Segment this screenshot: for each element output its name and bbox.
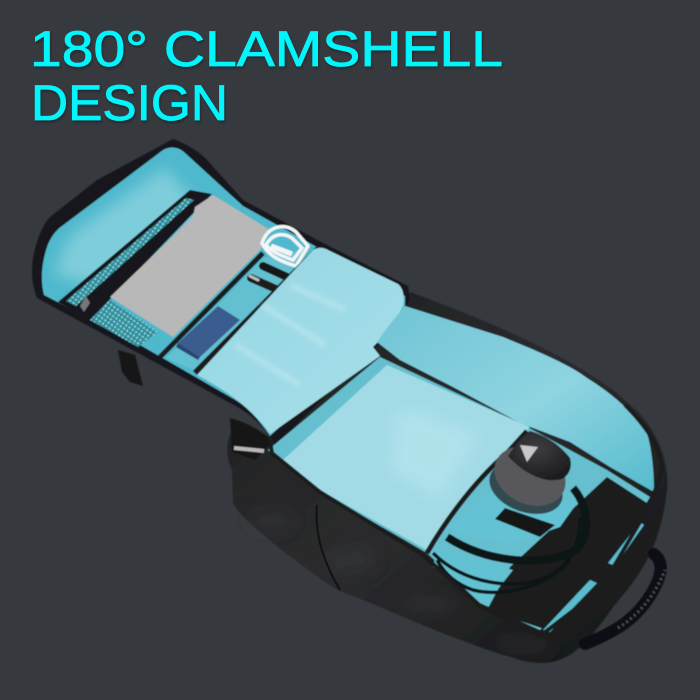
ear cup top plate [508, 431, 571, 480]
front rim binding [270, 405, 662, 636]
grey felt sleeve [110, 195, 270, 337]
camouflage mottling [246, 507, 553, 653]
power bank [176, 306, 240, 360]
logo [520, 445, 538, 462]
pocket soft highlight [390, 411, 480, 500]
white cable [262, 227, 308, 266]
headband arcs [433, 488, 586, 592]
black laptop [487, 477, 647, 630]
velcro patch [495, 508, 555, 537]
teal rear pocket [450, 487, 577, 543]
opened flap outer edge [32, 139, 410, 445]
backpack photo illustration [32, 139, 667, 663]
lining highlight [55, 168, 205, 285]
small black cylinders [250, 266, 287, 289]
side zipper pull [230, 418, 272, 460]
zipper pocket band [58, 190, 212, 320]
pocket creases [235, 285, 345, 385]
main compartment back wall [377, 306, 654, 492]
flap teal lining [42, 148, 405, 436]
title: DESIGN [31, 75, 228, 131]
buckle [118, 350, 143, 386]
black elastic straps [160, 247, 320, 373]
large light pocket panel [197, 248, 404, 434]
mesh pocket [90, 300, 158, 347]
main compartment floor [268, 357, 650, 630]
teal side slivers [543, 522, 644, 632]
title: 180° CLAMSHELL [30, 21, 503, 77]
teal front pocket [433, 550, 513, 603]
laptop sleeve pocket [283, 365, 530, 550]
headphones [433, 431, 586, 592]
ear cup ring [482, 452, 570, 524]
carry handle [585, 554, 665, 644]
side panel seam [317, 505, 340, 590]
title [30, 21, 503, 131]
bag outer shell [227, 292, 667, 663]
accessory pouch strip [166, 248, 312, 372]
pocket edge binding [427, 431, 527, 553]
ear cup side [485, 435, 575, 517]
